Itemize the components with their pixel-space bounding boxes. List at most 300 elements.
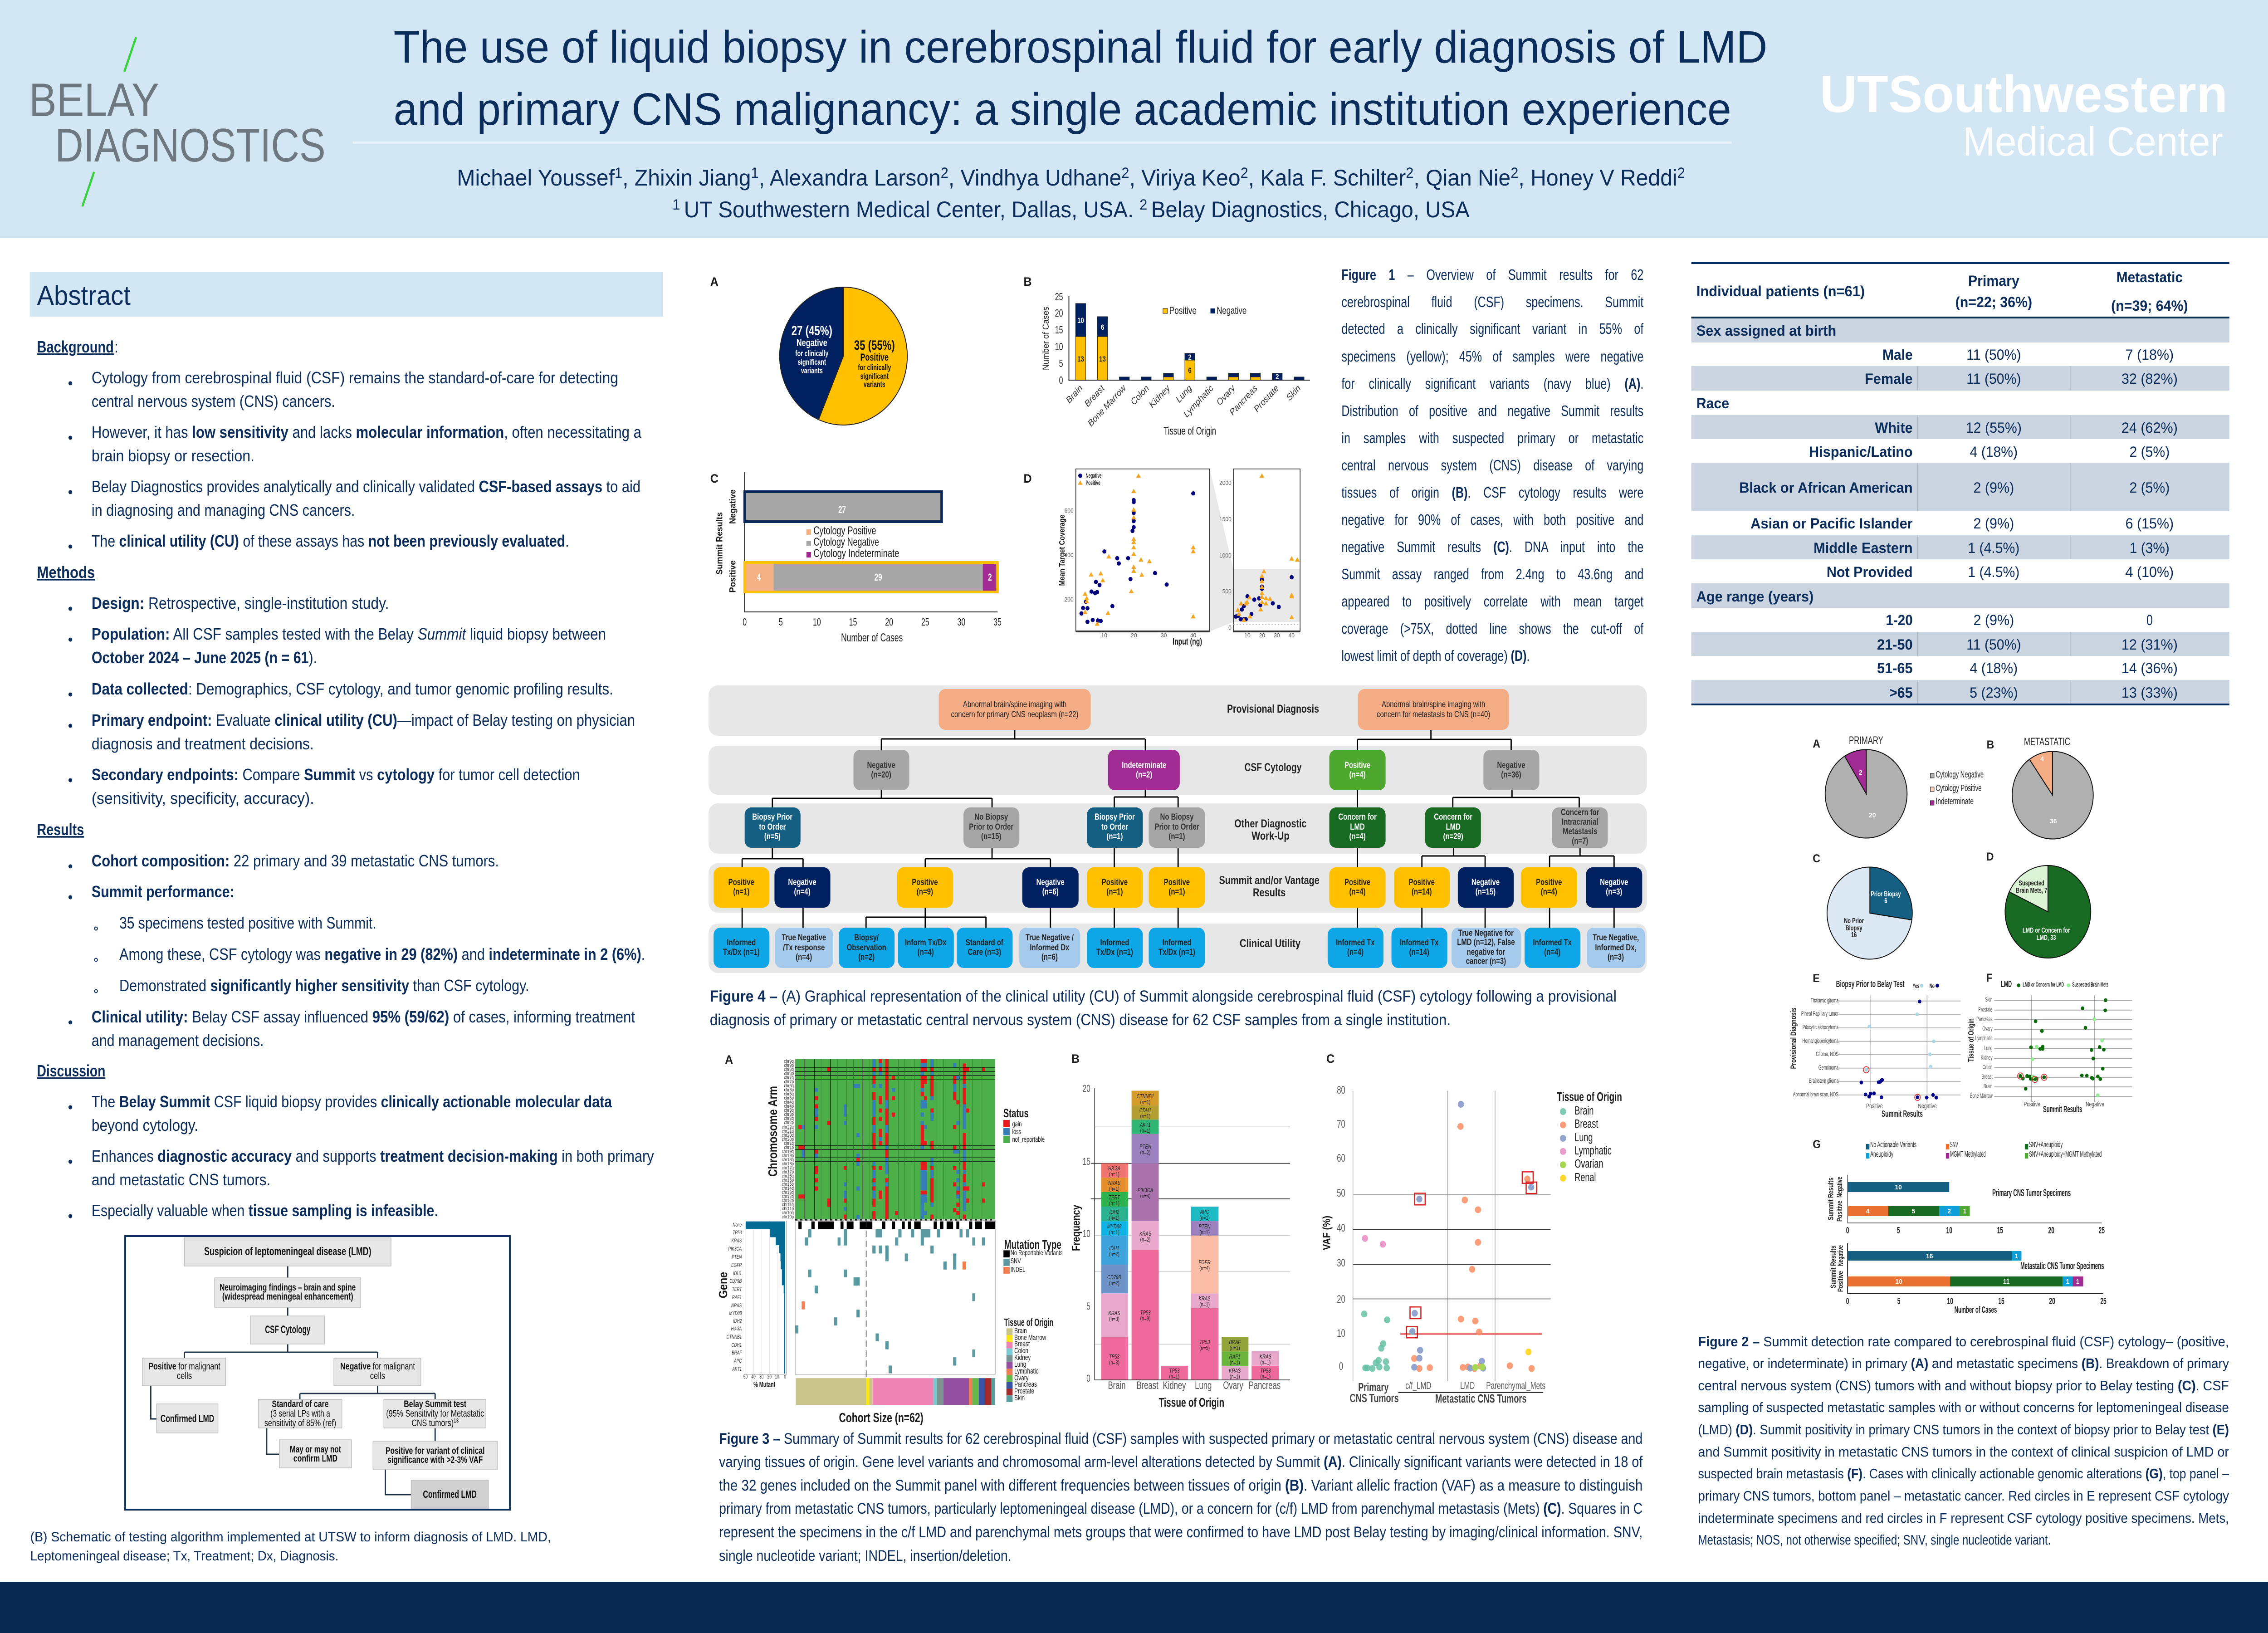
- flowchart: LMD testing algorithm: Positive for malignant: [148, 1361, 220, 1372]
- table: patient demographics: 12 (31%): [2121, 636, 2178, 653]
- legend: status: loss: [1012, 1128, 1021, 1135]
- figure 1 caption: tissues of origin (B). CSF cytology results were: [1341, 484, 1643, 501]
- row: summit results: (n=4): [1349, 887, 1366, 896]
- legend: tissue of origin: Lung: [1014, 1360, 1026, 1369]
- chart: scatter D input vs coverage: 500: [1222, 588, 1232, 595]
- authors: , Alexandra Larson: [759, 165, 941, 191]
- chart: pie B metastatic: 4: [2040, 756, 2044, 763]
- row: other diagnostic work-up: Prior to Order: [969, 822, 1013, 831]
- table: patient demographics: 11 (50%): [1966, 347, 2021, 363]
- chart: pie C prior biopsy: Biopsy: [1846, 924, 1862, 932]
- row: other diagnostic work-up: Biopsy Prior: [752, 812, 793, 821]
- flowchart: LMD testing algorithm: [125, 1236, 510, 1510]
- chart: oncoplot gene mutations: TP53: [733, 1230, 742, 1236]
- chart: chromosome arm heatmap: chr11q: [782, 1202, 794, 1208]
- chart: dot plot F tissue of origin: Breast: [1982, 1074, 1993, 1081]
- table: patient demographics: 1 (4.5%): [1968, 564, 2019, 580]
- legend: status: not_reportable: [1012, 1135, 1045, 1143]
- flowchart: LMD testing algorithm: CNS tumors): [411, 1418, 463, 1428]
- heading: abstract: [30, 272, 663, 317]
- chart: chromosome arm heatmap: chr20q: [782, 1133, 794, 1138]
- chart: dot plot F tissue of origin: LMD or Concern for LMD: [2023, 981, 2064, 988]
- methods section: (sensitivity, specificity, accuracy).: [92, 790, 314, 807]
- row: summit results: Positive: [912, 877, 938, 887]
- legend: tissue of origin: Bone Marrow: [1014, 1334, 1046, 1342]
- flowchart: LMD testing algorithm: (95% Sensitivity for Metastatic: [386, 1408, 484, 1419]
- chart: dot plot E provisional diagnosis: Pilocytic astrocytoma: [1803, 1024, 1838, 1031]
- chart: B stacked gene frequency: IDH1: [1110, 1246, 1119, 1252]
- chart: bars G actionable alterations: [1813, 1138, 2107, 1315]
- metastatic bars: 20: [2049, 1296, 2055, 1306]
- chart: B stacked gene frequency: RAF1: [1229, 1354, 1241, 1360]
- chart: pie B metastatic: METASTATIC: [2024, 736, 2070, 748]
- authors: 2: [1121, 165, 1129, 181]
- row: summit results: (n=1): [1106, 887, 1123, 896]
- chart: bar B tissue of origin: Prostate: [1252, 383, 1281, 414]
- chart: B stacked gene frequency: APC: [1200, 1209, 1209, 1215]
- chart: B stacked gene frequency: [1069, 1051, 1290, 1409]
- row: clinical utility: Informed: [727, 938, 756, 947]
- figure 2 caption: suspected brain metastasis (F). Cases with clinically actionable genomic alterations (G), top panel –: [1698, 1466, 2229, 1481]
- chart: scatter D input vs coverage: 30: [1161, 632, 1167, 639]
- chart: bar C cytology by summit result: 25: [921, 616, 929, 628]
- flowchart: LMD testing algorithm: cells: [177, 1371, 192, 1381]
- authors: , Zhixin Jiang: [622, 165, 751, 191]
- chart: oncoplot gene mutations: None: [733, 1222, 742, 1228]
- results section: Demonstrated significantly higher sensitivity than CSF cytology.: [119, 977, 529, 995]
- chart: chromosome arm heatmap: chr11p: [782, 1206, 794, 1212]
- row labels: Results: [1253, 886, 1286, 899]
- legend: mutation type: SNV: [1011, 1257, 1021, 1265]
- row labels: Summit and/or Vantage: [1219, 874, 1320, 887]
- row: provisional diagnosis: [938, 689, 1509, 730]
- chart: B stacked gene frequency: CD79B: [1107, 1275, 1121, 1281]
- chart: pie D LMD concern: LMD or Concern for: [2023, 926, 2070, 934]
- legend: tissue of origin: [1004, 1316, 1053, 1403]
- chart: dot plot E provisional diagnosis: Provisional Diagnosis: [1789, 1008, 1798, 1069]
- chart: chromosome arm heatmap: chr8q: [784, 1067, 794, 1072]
- chart: dot plot F tissue of origin: Positive: [2024, 1100, 2040, 1108]
- chart: B stacked gene frequency: (n=1): [1199, 1302, 1210, 1308]
- row: clinical utility: True Negative for: [1458, 928, 1514, 938]
- metastatic bars: Negative: [1836, 1245, 1845, 1266]
- row: clinical utility: negative for: [1467, 947, 1505, 957]
- results section: and management decisions.: [92, 1032, 264, 1050]
- chart: scatter D input vs coverage: 0: [1228, 625, 1232, 631]
- discussion section: [37, 1062, 654, 1220]
- legend: cytology: [1931, 770, 1984, 807]
- chart: B stacked gene frequency: Breast: [1137, 1379, 1158, 1392]
- chart: B stacked gene frequency: (n=2): [1140, 1237, 1151, 1243]
- logo: UT Southwestern Medical Center: [1820, 65, 2228, 165]
- row: clinical utility: (n=4): [1347, 947, 1364, 957]
- chart: bar C cytology by summit result: 2: [988, 572, 992, 583]
- figure 1 caption: negative Summit results (C). DNA input into the: [1341, 538, 1643, 555]
- panel: abstract: [30, 272, 663, 1564]
- chart: scatter D input vs coverage: [1023, 469, 1300, 647]
- chart: pie A summit results: significant: [798, 358, 826, 367]
- chart: chromosome arm heatmap: chr12q: [782, 1194, 794, 1199]
- authors: 2: [1510, 165, 1518, 181]
- row labels: Work-Up: [1251, 830, 1290, 842]
- flowchart: LMD testing algorithm: (3 serial LPs with a: [270, 1408, 330, 1419]
- panel: figure 2: [1698, 734, 2229, 1548]
- metastatic bars: Summit Results: [1829, 1246, 1838, 1288]
- row: provisional diagnosis: concern for metastasis to CNS (n=40): [1377, 709, 1490, 719]
- footer band: [0, 1582, 2268, 1633]
- chart: B stacked gene frequency: (n=1): [1109, 1215, 1119, 1221]
- chart: chromosome arm heatmap: chr5p: [784, 1095, 794, 1101]
- chart: pie A summit results: [710, 274, 907, 425]
- chart: oncoplot gene mutations: CDH1: [731, 1343, 742, 1348]
- chart: B stacked gene frequency: TP53: [1109, 1354, 1120, 1360]
- legend: tissue of origin: Ovary: [1014, 1374, 1029, 1383]
- metastatic bars: 1: [2015, 1253, 2018, 1260]
- chart: B stacked gene frequency: (n=1): [1109, 1201, 1119, 1207]
- chart: oncoplot gene mutations: 10: [775, 1374, 779, 1380]
- chart: dot plot F tissue of origin: Brain: [1984, 1083, 1993, 1090]
- primary bars: Negative: [1835, 1177, 1844, 1198]
- table: patient demographics: 1-20: [1886, 612, 1913, 628]
- flowchart: LMD testing algorithm: CSF Cytology: [265, 1323, 310, 1335]
- chart: bar B tissue of origin: 13: [1099, 355, 1106, 363]
- chart: B stacked gene frequency: TP53: [1140, 1310, 1151, 1316]
- row: other diagnostic work-up: to Order: [759, 822, 786, 831]
- figure 2 caption: sampling of suspected metastatic samples with or without concerns for leptomeningeal disease: [1698, 1400, 2229, 1415]
- figure 1 caption: central nervous system (CNS) disease of varying: [1341, 457, 1643, 474]
- row: other diagnostic work-up: (n=5): [764, 831, 781, 841]
- legend: variant classes: [1866, 1139, 2102, 1159]
- chart: dot plot E provisional diagnosis: Hemangiopericytoma: [1802, 1038, 1838, 1045]
- figure 2 caption: and Summit positivity in metastatic CNS tumors in the context of clinical suspicion of LMD or: [1698, 1444, 2229, 1460]
- chart: chromosome arm heatmap: chr10p: [782, 1214, 794, 1220]
- chart: bar C cytology by summit result: C: [710, 471, 719, 485]
- chart: B stacked gene frequency: TP53: [1169, 1368, 1180, 1374]
- chart: B stacked gene frequency: Brain: [1108, 1379, 1125, 1392]
- row: clinical utility: (n=4): [1544, 947, 1560, 957]
- chart: bar B tissue of origin: 10: [1077, 317, 1084, 325]
- chart: B stacked gene frequency: Ovary: [1223, 1379, 1243, 1392]
- chart: bar B tissue of origin: 20: [1055, 308, 1063, 319]
- table: patient demographics: 5 (23%): [1970, 684, 2018, 701]
- table: patient demographics: 4 (18%): [1970, 660, 2018, 676]
- chart: dot plot F tissue of origin: Ovary: [1982, 1026, 1993, 1032]
- legend: tissue of origin: Kidney: [1014, 1354, 1031, 1362]
- primary bars: Summit Results: [1826, 1178, 1835, 1220]
- figure 2 caption: primary CNS tumors, bottom panel – metastatic cancer. Red circles in E represent CSF cytology: [1698, 1488, 2229, 1504]
- metastatic bars: Number of Cases: [1955, 1305, 1997, 1315]
- chart: oncoplot gene mutations: Gene: [717, 1272, 730, 1298]
- chart: chromosome arm heatmap: chr4q: [784, 1100, 794, 1105]
- flowchart: LMD testing algorithm: 13: [454, 1418, 459, 1424]
- chart: B stacked gene frequency: KRAS: [1229, 1368, 1241, 1374]
- chart: oncoplot gene mutations: NRAS: [731, 1303, 742, 1309]
- chart: B stacked gene frequency: (n=1): [1169, 1374, 1179, 1380]
- row: other diagnostic work-up: Metastasis: [1563, 826, 1598, 836]
- chart: bar C cytology by summit result: Negative: [728, 489, 738, 524]
- figure 1 caption: lowest limit of depth of coverage) (D).: [1341, 647, 1530, 664]
- chart: scatter D input vs coverage: 200: [1065, 596, 1074, 603]
- chart: C VAF scatter: c/f_LMD: [1405, 1380, 1431, 1392]
- flowchart: LMD testing algorithm: Positive for variant of clinical: [386, 1446, 485, 1456]
- metastatic bars: 10: [1947, 1296, 1953, 1306]
- chart: C VAF scatter: [1321, 1051, 1622, 1405]
- methods section: Population: All CSF samples tested with the Belay Summit liquid biopsy between: [92, 626, 606, 643]
- chart: B stacked gene frequency: (n=4): [1140, 1193, 1151, 1199]
- table: patient demographics: Primary: [1968, 273, 2019, 289]
- chart: pie B metastatic: [1987, 736, 2093, 839]
- chart: pie A summit results: A: [710, 274, 719, 288]
- figure 1 caption: [1341, 259, 1643, 667]
- figure 1 caption: Figure 1 – Overview of Summit results for 62: [1341, 266, 1643, 283]
- header band: [0, 0, 2268, 238]
- chart: B stacked gene frequency: (n=1): [1109, 1172, 1119, 1178]
- chart: chromosome arm heatmap: chr19q: [782, 1149, 794, 1154]
- authors: 2: [1406, 165, 1413, 181]
- chart: scatter D input vs coverage: D: [1023, 471, 1032, 485]
- chart: B stacked gene frequency: (n=1): [1199, 1215, 1210, 1221]
- chart: chromosome arm heatmap: chr20p: [782, 1137, 794, 1142]
- row: CSF cytology: Positive: [1344, 760, 1370, 770]
- chart: C VAF scatter: 30: [1337, 1257, 1345, 1269]
- legend: VAF tissue of origin: Tissue of Origin: [1557, 1090, 1622, 1104]
- row: clinical utility: Tx/Dx (n=1): [723, 947, 760, 957]
- table: patient demographics: 0: [2146, 612, 2153, 628]
- chart: oncoplot gene mutations: H3-3A: [731, 1326, 742, 1332]
- legend: variant classes: SNV+Aneuploidy: [2029, 1139, 2063, 1149]
- logo: UT Southwestern Medical Center: UTSouthwestern: [1820, 65, 2228, 123]
- chart: bar B tissue of origin: 6: [1101, 323, 1104, 332]
- row: clinical utility: Care (n=3): [968, 947, 1001, 957]
- figure 2 caption: central nervous system (CNS) tumors with and without biopsy prior to Belay testing (C). CSF: [1698, 1378, 2229, 1393]
- row: other diagnostic work-up: Intracranial: [1562, 817, 1598, 826]
- metastatic bars: 25: [2100, 1296, 2107, 1306]
- table: patient demographics: 7 (18%): [2126, 347, 2174, 363]
- chart: oncoplot gene mutations: MYD88: [729, 1311, 742, 1316]
- row: clinical utility: (n=4): [796, 952, 812, 962]
- chart: B stacked gene frequency: (n=2): [1109, 1281, 1119, 1286]
- chart: pie A primary: A: [1813, 738, 1820, 750]
- chart: chromosome arm heatmap: chr5q: [784, 1091, 794, 1097]
- chart: pie A primary: [1813, 734, 1907, 838]
- figure 1 caption: detected a clinically significant variant in 55% of: [1341, 320, 1643, 337]
- chart: chromosome arm heatmap: A: [725, 1052, 733, 1066]
- chart: bar C cytology by summit result: 15: [849, 616, 857, 628]
- background section: Belay Diagnostics provides analytically and clinically validated CSF-based assays to aid: [92, 478, 640, 496]
- figure 2 caption: Figure 2 – Summit detection rate compared to cerebrospinal fluid (CSF) cytology– (positive,: [1698, 1334, 2229, 1349]
- logo: Belay Diagnostics: DIAGNOSTICS: [55, 119, 326, 172]
- table: patient demographics: Male: [1882, 347, 1913, 363]
- table: patient demographics: 6 (15%): [2126, 515, 2174, 532]
- chart: bar B tissue of origin: 5: [1059, 358, 1063, 370]
- chart: scatter D input vs coverage: 10: [1244, 632, 1251, 639]
- row: summit results: Positive: [1164, 877, 1190, 887]
- legend: VAF tissue of origin: Renal: [1574, 1171, 1596, 1184]
- row: clinical utility: (n=4): [918, 947, 934, 957]
- row: summit results: Positive: [1536, 877, 1562, 887]
- chart: pie B metastatic: B: [1987, 738, 1994, 751]
- row: clinical utility: LMD (n=12), False: [1457, 937, 1515, 947]
- chart: chromosome arm heatmap: chr9p: [784, 1063, 794, 1068]
- chart: bar C cytology by summit result: 20: [885, 616, 893, 628]
- figure 3 caption: varying tissues of origin. Gene level variants and chromosomal arm-level alterations detected by Summit (A). Clinically significant variants were detected in 18 of: [719, 1453, 1643, 1470]
- legend: cytology: Cytology Negative: [1936, 770, 1984, 780]
- figure 3 caption: represent the specimens in the c/f LMD and parenchymal mets groups that were confirmed to have LMD post Belay testing by imaging/clinical information. SNV,: [719, 1523, 1642, 1540]
- figure 3 caption: Figure 3 – Summary of Summit results for 62 cerebrospinal fluid (CSF) samples with suspected primary or metastatic central nervous system (CNS) disease and: [719, 1430, 1642, 1447]
- chart: C VAF scatter: 40: [1337, 1222, 1345, 1234]
- affiliations: Belay Diagnostics, Chicago, USA: [1151, 197, 1470, 222]
- table: patient demographics: (n=22; 36%): [1955, 294, 2032, 310]
- chart: chromosome arm heatmap: chr9q: [784, 1059, 794, 1064]
- legend: variant classes: No Actionable Variants: [1870, 1139, 1916, 1149]
- row: summit results: (n=1): [733, 887, 749, 896]
- chart: bar C cytology by summit result: 29: [875, 572, 882, 583]
- flowchart caption: (B) Schematic of testing algorithm implemented at UTSW to inform diagnosis of LMD. LMD,: [30, 1530, 551, 1545]
- chart: dot plot F tissue of origin: F: [1986, 972, 1993, 984]
- background bands: [709, 685, 1647, 973]
- row: summit results: (n=4): [1541, 887, 1557, 896]
- authors: , Honey V Reddi: [1518, 165, 1677, 191]
- chart: bar B tissue of origin: 15: [1055, 324, 1063, 336]
- chart: dot plot F tissue of origin: Lung: [1984, 1045, 1993, 1052]
- flowchart: LMD testing algorithm: May or may not: [290, 1444, 341, 1455]
- title: and primary CNS malignancy: a single academic institution experience: [394, 84, 1731, 135]
- chart: B stacked gene frequency: (n=2): [1140, 1150, 1151, 1156]
- figure 4 caption: Figure 4 – (A) Graphical representation of the clinical utility (CU) of Summit alongside cerebrospinal fluid (CSF) cytology following a provisional: [710, 988, 1617, 1005]
- chart: oncoplot gene mutations: EGFR: [731, 1263, 742, 1268]
- row: summit results: (n=3): [1606, 887, 1622, 896]
- chart: B stacked gene frequency: (n=3): [1109, 1316, 1119, 1322]
- chart: oncoplot gene mutations: KRAS: [732, 1238, 742, 1244]
- chart: bar B tissue of origin: Number of Cases: [1041, 307, 1051, 370]
- row: summit results: (n=4): [794, 887, 811, 896]
- legend: VAF tissue of origin: Lung: [1574, 1131, 1593, 1144]
- legend: mutation type: INDEL: [1011, 1266, 1026, 1273]
- chart: oncoplot gene mutations: 30: [759, 1374, 764, 1380]
- chart: B stacked gene frequency: IDH2: [1110, 1209, 1119, 1215]
- row: other diagnostic work-up: Prior to Order: [1154, 822, 1199, 831]
- chart: dot plot F tissue of origin: Bone Marrow: [1970, 1093, 1993, 1100]
- affiliations: 2: [1139, 196, 1151, 213]
- flowchart: LMD testing algorithm: Standard of care: [272, 1399, 329, 1409]
- methods section: Design: Retrospective, single-institution study.: [92, 595, 389, 612]
- chart: B stacked gene frequency: (n=1): [1260, 1360, 1271, 1366]
- row: summit results: Positive: [1344, 877, 1370, 887]
- chart: chromosome arm heatmap: chr16q: [782, 1173, 794, 1179]
- chart: B stacked gene frequency: 5: [1086, 1301, 1090, 1312]
- row: clinical utility: Informed Dx: [1030, 943, 1070, 952]
- chart: B stacked gene frequency: KRAS: [1139, 1231, 1151, 1237]
- chart: oncoplot gene mutations: 50: [743, 1374, 748, 1380]
- chart: B stacked gene frequency: 15: [1083, 1156, 1090, 1168]
- discussion section: Discussion: [37, 1062, 105, 1080]
- chart: bar B tissue of origin: Positive: [1169, 305, 1197, 316]
- legend: mutation type: No Reportable Variants: [1011, 1249, 1063, 1257]
- row: clinical utility: Observation: [847, 943, 886, 952]
- flowchart: LMD testing algorithm: Neuroimaging findings – brain and spine: [220, 1282, 356, 1293]
- chart: bar B tissue of origin: 0: [1059, 375, 1063, 386]
- chart: B stacked gene frequency: (n=1): [1230, 1374, 1240, 1380]
- chart: chromosome arm heatmap: chr1q: [784, 1141, 794, 1146]
- panel: figure 3: [717, 1051, 1643, 1564]
- chart: oncoplot gene mutations: IDH1: [733, 1271, 742, 1276]
- chart: chromosome arm heatmap: chr13q: [782, 1190, 794, 1195]
- chart: bar B tissue of origin: [1023, 274, 1310, 437]
- figure 2 caption: [1698, 1334, 2229, 1548]
- legend: cytology: Cytology Positive: [1936, 783, 1982, 793]
- chart: B stacked gene frequency: PTEN: [1139, 1144, 1152, 1150]
- primary bars: 25: [2099, 1226, 2105, 1236]
- chart: B stacked gene frequency: TP53: [1260, 1368, 1271, 1374]
- chart: C VAF scatter: 80: [1337, 1084, 1345, 1096]
- legend: VAF tissue of origin: Brain: [1574, 1104, 1593, 1117]
- chart: C VAF scatter: Parenchymal_Mets: [1486, 1380, 1545, 1392]
- primary bars: [1826, 1175, 2105, 1236]
- results section: 35 specimens tested positive with Summit.: [119, 914, 376, 932]
- chart: chromosome arm heatmap: chr10q: [782, 1210, 794, 1216]
- discussion section: Enhances diagnostic accuracy and supports treatment decision-making in both primary: [92, 1148, 654, 1165]
- chart: B stacked gene frequency: (n=4): [1199, 1266, 1210, 1271]
- row: CSF cytology: (n=2): [1136, 770, 1152, 779]
- chart: bar B tissue of origin: Ovary: [1215, 383, 1237, 407]
- results section: Summit performance:: [92, 883, 235, 901]
- table: patient demographics: Middle Eastern: [1813, 540, 1913, 556]
- row: summit results: (n=9): [917, 887, 933, 896]
- figure 1 caption: for clinically significant variants (navy blue) (A).: [1341, 375, 1643, 392]
- chart: bar C cytology by summit result: 30: [958, 616, 965, 628]
- legend: VAF tissue of origin: Lymphatic: [1574, 1144, 1612, 1157]
- chart: chromosome arm heatmap: [725, 1052, 1045, 1220]
- primary bars: 2: [1947, 1208, 1951, 1215]
- table: patient demographics: 51-65: [1877, 660, 1913, 676]
- legend: VAF tissue of origin: Breast: [1574, 1117, 1598, 1130]
- chart: pie C prior biopsy: C: [1813, 852, 1820, 865]
- figure 1 caption: Distribution of positive and negative Summit results: [1341, 402, 1643, 419]
- table: patient demographics: 4 (18%): [1970, 444, 2018, 460]
- chart: pie D LMD concern: D: [1986, 851, 1994, 863]
- chart: dot plot F tissue of origin: Tissue of Origin: [1966, 1018, 1975, 1062]
- chart: chromosome arm heatmap: chr17p: [782, 1169, 794, 1175]
- authors: 2: [1241, 165, 1248, 181]
- chart: pie B metastatic: 36: [2050, 818, 2057, 825]
- chart: bar C cytology by summit result: Summit Results: [715, 512, 724, 575]
- chart: dot plot E provisional diagnosis: No: [1930, 983, 1935, 990]
- results section: Among these, CSF cytology was negative in 29 (82%) and indeterminate in 2 (6%).: [119, 946, 645, 963]
- chart: chromosome arm heatmap: chr4p: [784, 1104, 794, 1109]
- chart: C VAF scatter: 10: [1337, 1327, 1345, 1340]
- primary bars: 0: [1846, 1226, 1849, 1236]
- chart: B stacked gene frequency: FGFR: [1198, 1260, 1211, 1266]
- figure 1 caption: specimens (yellow); 45% of samples were negative: [1341, 348, 1643, 365]
- table: patient demographics: Individual patients (n=61): [1696, 283, 1865, 299]
- chart: oncoplot gene mutations: CD79B: [729, 1279, 742, 1284]
- chart: pie A summit results: variants: [801, 367, 823, 376]
- chart: dot plot F tissue of origin: Kidney: [1981, 1055, 1993, 1061]
- row: CSF cytology: Negative: [1497, 760, 1525, 770]
- figure 2 caption: indeterminate specimens and red circles in F represent CSF cytology positive specimens. Mets,: [1698, 1511, 2229, 1526]
- chart: chromosome arm heatmap: chr8p: [784, 1071, 794, 1076]
- figure 2 caption: negative, or indeterminate) in primary (A) and metastatic specimens (B). Breakdown of primary: [1698, 1356, 2229, 1371]
- row labels: Clinical Utility: [1240, 937, 1301, 950]
- chart: pie A summit results: for clinically: [795, 349, 829, 358]
- row: clinical utility: (n=6): [1041, 952, 1058, 962]
- flowchart: LMD testing algorithm: sensitivity of 85% (ref): [264, 1418, 336, 1428]
- chart: scatter D input vs coverage: 40: [1289, 632, 1295, 639]
- figure 3 caption: primary from metastatic CNS tumors, particularly leptomeningeal disease (LMD), or a concern for (c/f) LMD from parenchymal metastasis (Mets) (C). Squares in C: [719, 1500, 1642, 1517]
- chart: dot plot F tissue of origin: Negative: [2086, 1100, 2104, 1108]
- row: summit results: Positive: [728, 877, 754, 887]
- chart: pie A primary: 2: [1859, 769, 1862, 777]
